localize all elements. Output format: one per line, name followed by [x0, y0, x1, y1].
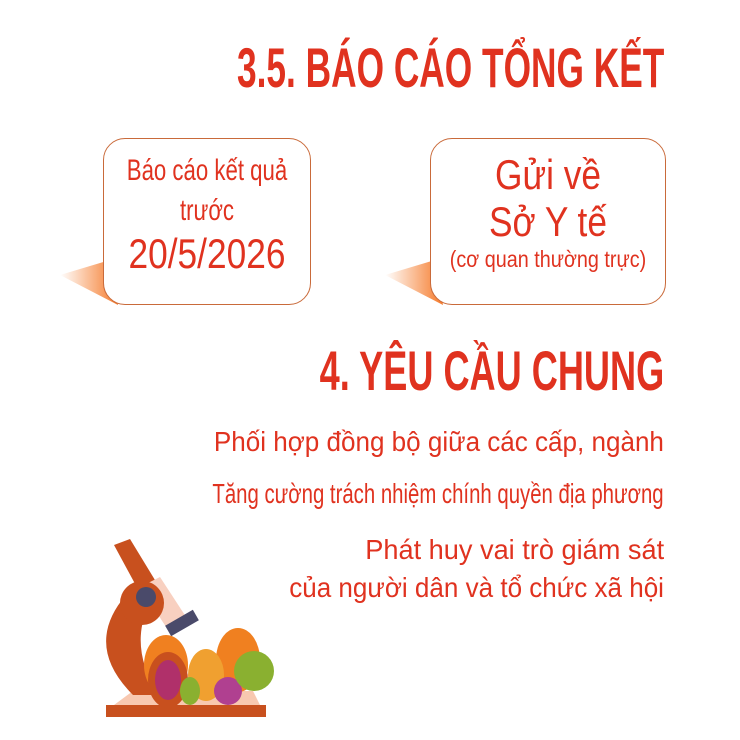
box: send to: (cơ quan thường trực) — [450, 246, 646, 272]
box: report deadline: Báo cáo kết quả — [127, 154, 287, 187]
box: send to: Sở Y tế — [489, 198, 607, 245]
heading: 4: 4. YÊU CẦU CHUNG — [319, 339, 664, 402]
line 4: của người dân và tổ chức xã hội — [289, 572, 664, 603]
line 3: Phát huy vai trò giám sát — [365, 534, 664, 565]
box: send to: Gửi về — [495, 151, 601, 198]
box: report deadline — [103, 138, 311, 305]
line 1: Phối hợp đồng bộ giữa các cấp, ngành — [214, 426, 664, 457]
box: send to — [430, 138, 666, 305]
icon: microscope with food — [106, 539, 274, 717]
box: report deadline: trước — [180, 194, 234, 227]
title: 3.5: 3.5. BÁO CÁO TỔNG KẾT — [237, 36, 664, 99]
line 2: Tăng cường trách nhiệm chính quyền địa phương — [213, 478, 664, 509]
box: report deadline: 20/5/2026 — [129, 230, 285, 277]
tail: box 2 — [387, 262, 443, 305]
tail: box 1 — [62, 262, 118, 305]
